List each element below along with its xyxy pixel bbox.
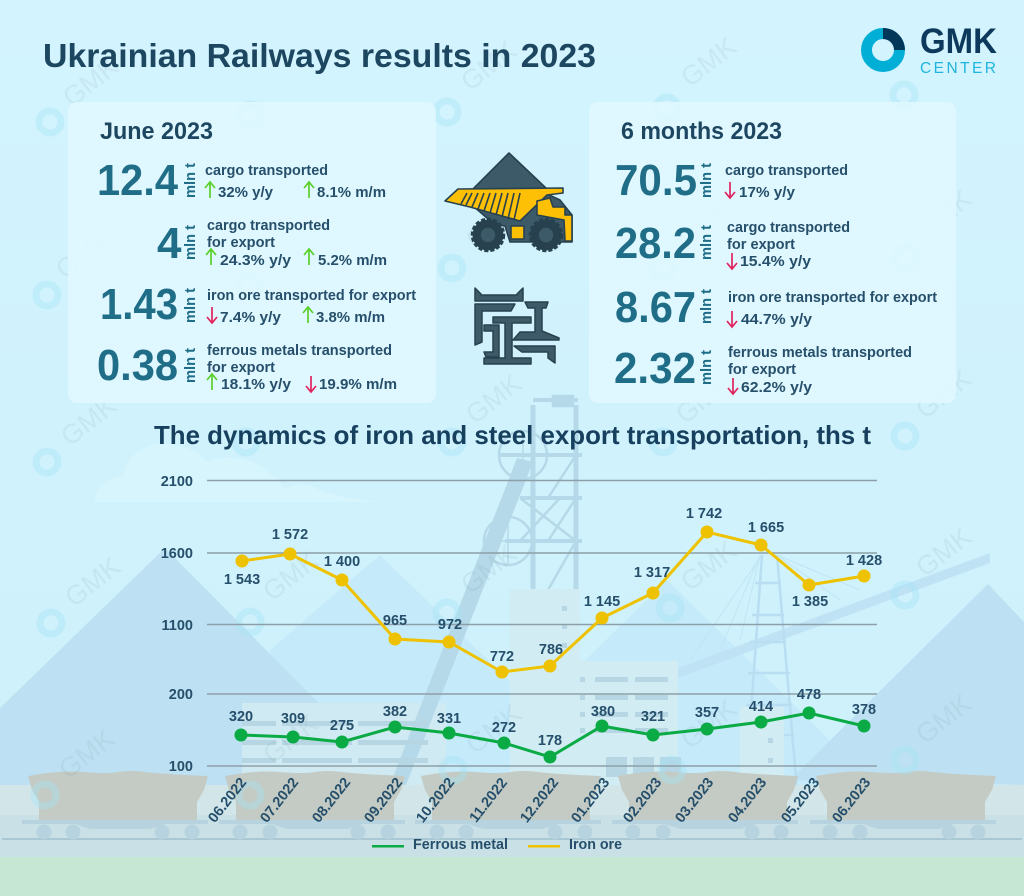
- stat: cargo for export: cargo transported: [727, 220, 850, 236]
- GMK Center logo: [866, 22, 997, 77]
- x axis dates: 01.2023: [568, 775, 613, 826]
- stat: ferrous metals for export: for export: [728, 362, 796, 378]
- y axis labels: 1600: [161, 546, 193, 562]
- series: ferrous metal: 309: [281, 711, 305, 727]
- series: iron ore: 1 742: [686, 506, 722, 522]
- series: iron ore: 1 317: [634, 565, 670, 581]
- series: ferrous metal: 331: [437, 711, 461, 727]
- stat: ferrous metals for export: ferrous metals transported: [207, 343, 392, 359]
- legend: [372, 837, 622, 853]
- watermarks: GMK: [257, 708, 324, 770]
- series: iron ore: 1 665: [748, 520, 784, 536]
- x axis dates: 06.2023: [829, 775, 874, 826]
- series: iron ore: 965: [383, 613, 407, 629]
- series: iron ore: 1 543: [224, 572, 260, 588]
- watermarks: GMK: [910, 363, 977, 425]
- stat: iron ore for export: [615, 283, 937, 332]
- x axis dates: 10.2022: [413, 775, 458, 826]
- series: ferrous metal: 382: [383, 704, 407, 720]
- legend: Ferrous metal: [413, 837, 508, 853]
- watermarks: GMK: [910, 521, 977, 583]
- stat: cargo transported: mln t: [699, 163, 715, 198]
- watermarks: GMK: [257, 545, 324, 607]
- x axis dates: 09.2022: [361, 775, 406, 826]
- stat: iron ore for export: 8.67: [615, 283, 696, 332]
- watermarks: GMK: [670, 368, 737, 430]
- watermarks: GMK: [455, 538, 522, 600]
- panel: 6 months 2023: [589, 102, 956, 403]
- stat: cargo for export: mln t: [183, 225, 199, 260]
- series: iron ore: 972: [438, 617, 462, 633]
- watermarks: GMK: [460, 193, 527, 255]
- series: iron ore: [224, 506, 882, 678]
- series: ferrous metal: 178: [538, 733, 562, 749]
- stat: iron ore for export: mln t: [183, 288, 199, 323]
- series: iron ore: 772: [490, 649, 514, 665]
- y axis labels: 2100: [161, 474, 193, 490]
- line chart: [161, 474, 882, 853]
- x axis dates: 11.2022: [467, 775, 511, 826]
- stat: cargo for export: [157, 218, 387, 269]
- x axis dates: 02.2023: [620, 775, 665, 826]
- stat: iron ore for export: iron ore transported for export: [207, 288, 416, 304]
- stat: cargo transported: [615, 156, 848, 205]
- series: iron ore: 1 400: [324, 554, 360, 570]
- stat: ferrous metals for export: 18.1% y/y: [221, 377, 291, 393]
- stat: ferrous metals for export: 0.38: [97, 341, 178, 390]
- stat: ferrous metals for export: mln t: [699, 350, 715, 385]
- stat: ferrous metals for export: ferrous metals transported: [728, 345, 912, 361]
- series: iron ore: 1 145: [584, 594, 620, 610]
- GMK Center logo: CENTER: [920, 60, 996, 77]
- series: iron ore: 1 385: [792, 594, 828, 610]
- watermarks: GMK: [55, 390, 122, 452]
- x axis dates: 03.2023: [672, 775, 717, 826]
- series: ferrous metal: 272: [492, 720, 516, 736]
- watermarks: GMK: [59, 551, 126, 613]
- series: iron ore: 786: [539, 642, 563, 658]
- stat: cargo transported: [97, 156, 386, 205]
- chart heading: The dynamics of iron and steel export transportation, ths t: [154, 420, 871, 450]
- stat: cargo for export: for export: [207, 235, 275, 251]
- legend: Iron ore: [569, 837, 622, 853]
- series: iron ore: 1 572: [272, 527, 308, 543]
- stat: cargo for export: 5.2% m/m: [318, 253, 387, 269]
- series: iron ore: 1 428: [846, 553, 882, 569]
- watermarks: [34, 31, 977, 806]
- stat: iron ore for export: 7.4% y/y: [220, 310, 281, 326]
- stat: cargo transported: mln t: [183, 163, 199, 198]
- stat: cargo transported: 70.5: [615, 156, 697, 205]
- x axis dates: 04.2023: [725, 775, 770, 826]
- watermarks: GMK: [675, 693, 742, 755]
- stat: ferrous metals for export: 2.32: [614, 344, 696, 393]
- watermarks: GMK: [910, 183, 977, 245]
- series: ferrous metal: 478: [797, 687, 821, 703]
- x axis dates: 07.2022: [257, 775, 302, 826]
- stat: cargo transported: 8.1% m/m: [317, 185, 386, 201]
- stat: ferrous metals for export: [97, 341, 397, 393]
- stat: ferrous metals for export: 19.9% m/m: [319, 377, 397, 393]
- stat: iron ore for export: mln t: [699, 289, 715, 324]
- watermarks: GMK: [460, 368, 527, 430]
- watermarks: GMK: [675, 535, 742, 597]
- y axis labels: 1100: [162, 618, 193, 634]
- stat: cargo for export: 24.3% y/y: [220, 253, 291, 269]
- stat: cargo for export: 15.4% y/y: [740, 254, 811, 270]
- series: ferrous metal: 380: [591, 704, 615, 720]
- stat: ferrous metals for export: for export: [207, 360, 275, 376]
- stat: cargo for export: mln t: [699, 225, 715, 260]
- stat: cargo for export: 4: [157, 219, 182, 268]
- x axis dates: 12.2022: [517, 775, 562, 826]
- icon: mining dump truck: [445, 153, 572, 250]
- stat: iron ore for export: 44.7% y/y: [741, 312, 812, 328]
- watermarks: GMK: [675, 31, 742, 93]
- watermarks: GMK: [460, 698, 527, 760]
- series: ferrous metal: 357: [695, 705, 719, 721]
- watermarks: GMK: [670, 193, 737, 255]
- x axis dates: [205, 775, 874, 826]
- y axis labels: 200: [169, 687, 193, 703]
- series: ferrous metal: 378: [852, 702, 876, 718]
- watermarks: GMK: [57, 51, 124, 113]
- GMK Center logo: GMK: [920, 22, 997, 61]
- stat: cargo for export: for export: [727, 237, 795, 253]
- stat: cargo transported: 12.4: [97, 156, 178, 205]
- stat: iron ore for export: 3.8% m/m: [316, 310, 385, 326]
- series: ferrous metal: 275: [330, 718, 354, 734]
- series: ferrous metal: 321: [641, 709, 665, 725]
- x axis dates: 08.2022: [309, 775, 354, 826]
- stat: iron ore for export: iron ore transported for export: [728, 290, 937, 306]
- heading: June 2023: June 2023: [100, 118, 213, 145]
- stat: iron ore for export: [100, 280, 416, 329]
- series: ferrous metal: [229, 687, 876, 764]
- stat: cargo transported: 17% y/y: [739, 185, 795, 201]
- heading: 6 months 2023: 6 months 2023: [621, 118, 782, 145]
- watermarks: GMK: [455, 35, 522, 97]
- stat: cargo transported: cargo transported: [725, 163, 848, 179]
- watermarks: GMK: [50, 223, 117, 285]
- hopper wagons: [22, 771, 996, 840]
- x axis dates: 05.2023: [778, 775, 823, 826]
- icon: steel profiles: [475, 288, 559, 364]
- y axis labels: 100: [169, 759, 193, 775]
- title: Ukrainian Railways results in 2023: [43, 37, 596, 74]
- watermarks: GMK: [53, 723, 120, 785]
- watermarks: GMK: [910, 688, 977, 750]
- stat: cargo transported: cargo transported: [205, 163, 328, 179]
- stat: cargo for export: 28.2: [615, 219, 696, 268]
- stat: cargo for export: [615, 219, 850, 270]
- x axis dates: 06.2022: [205, 775, 250, 826]
- panel: June 2023: [68, 102, 436, 403]
- series: ferrous metal: 414: [749, 699, 773, 715]
- stat: ferrous metals for export: [614, 344, 912, 396]
- stat: ferrous metals for export: mln t: [183, 348, 199, 383]
- stat: cargo transported: 32% y/y: [218, 185, 273, 201]
- y axis labels: [161, 474, 193, 775]
- stat: iron ore for export: 1.43: [100, 280, 178, 329]
- series: ferrous metal: 320: [229, 709, 253, 725]
- stat: ferrous metals for export: 62.2% y/y: [741, 380, 812, 396]
- stat: cargo for export: cargo transported: [207, 218, 330, 234]
